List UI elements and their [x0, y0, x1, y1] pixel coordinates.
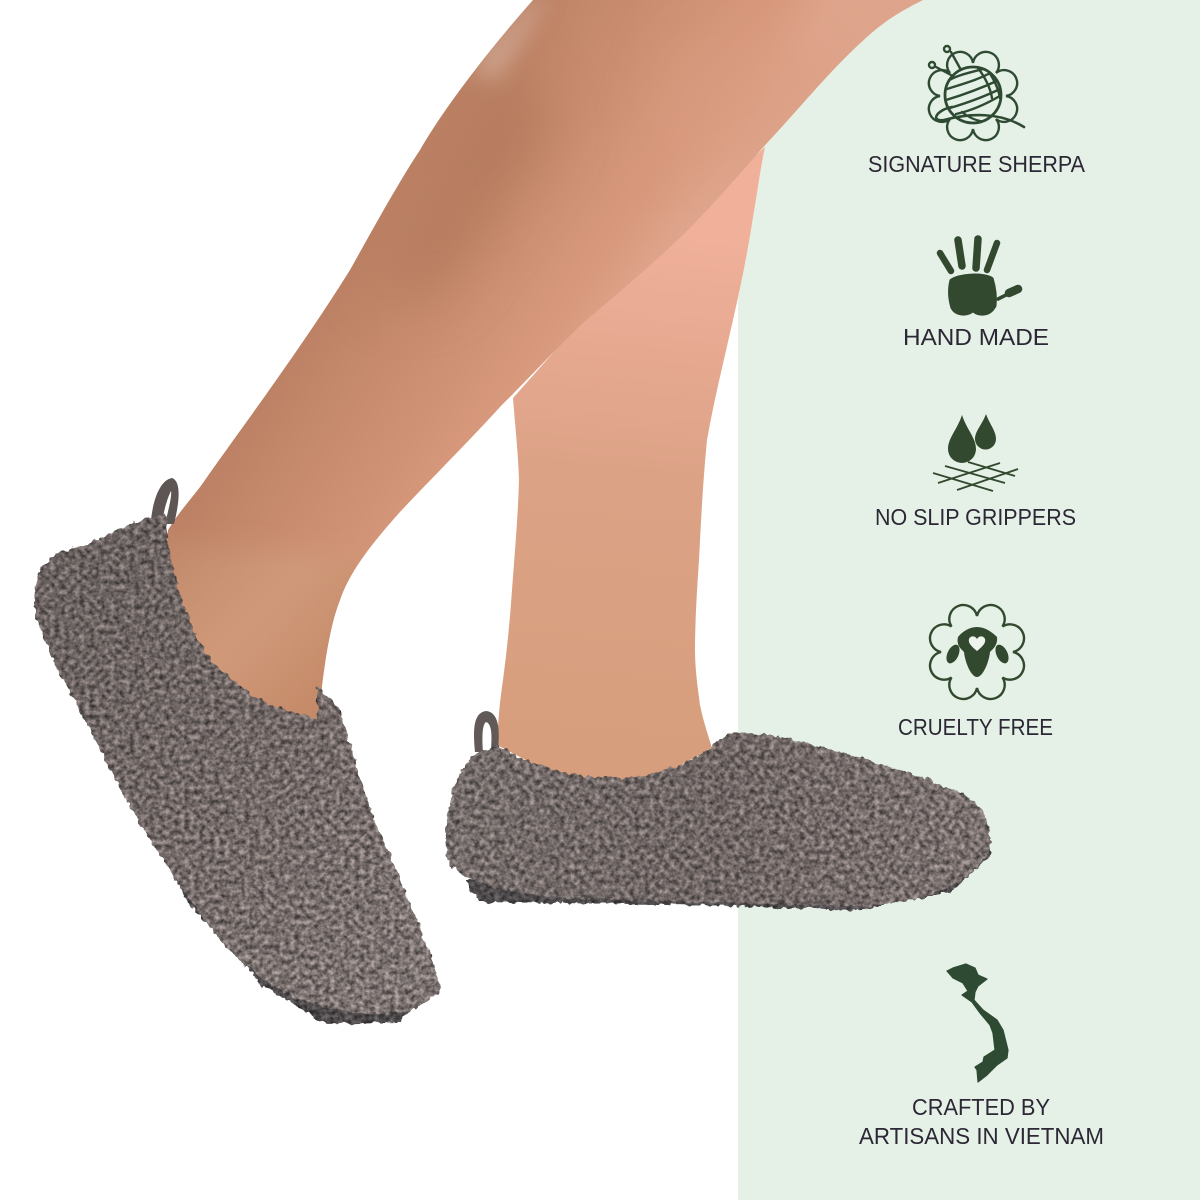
right slipper [446, 711, 992, 910]
left slipper [34, 478, 441, 1024]
feature: crafted by artisans in vietnam [859, 964, 1104, 1149]
label: SIGNATURE SHERPA [868, 151, 1085, 177]
feature: hand made [903, 239, 1049, 350]
feature: no slip grippers [875, 414, 1076, 530]
pull loop [151, 478, 179, 524]
label [859, 1094, 1104, 1149]
label: ARTISANS IN VIETNAM [859, 1123, 1104, 1149]
panel: green features column [738, 0, 1200, 1200]
label: HAND MADE [903, 324, 1049, 350]
feature: cruelty free [898, 605, 1053, 740]
label: NO SLIP GRIPPERS [875, 504, 1076, 530]
icon: handprint [940, 239, 1018, 315]
label: CRAFTED BY [912, 1094, 1050, 1120]
back leg [497, 147, 765, 782]
icon: yarn ball and needles in flower outline [929, 46, 1024, 140]
photo: legs wearing sherpa slippers [34, 0, 992, 1024]
front leg [140, 0, 923, 760]
icon: drops over grip mesh [933, 414, 1018, 491]
label: CRUELTY FREE [898, 714, 1053, 740]
icon: map of Vietnam [947, 964, 1008, 1082]
feature: signature sherpa [868, 46, 1085, 177]
pull loop [474, 711, 499, 752]
icon: sheep in flower outline [930, 605, 1024, 699]
